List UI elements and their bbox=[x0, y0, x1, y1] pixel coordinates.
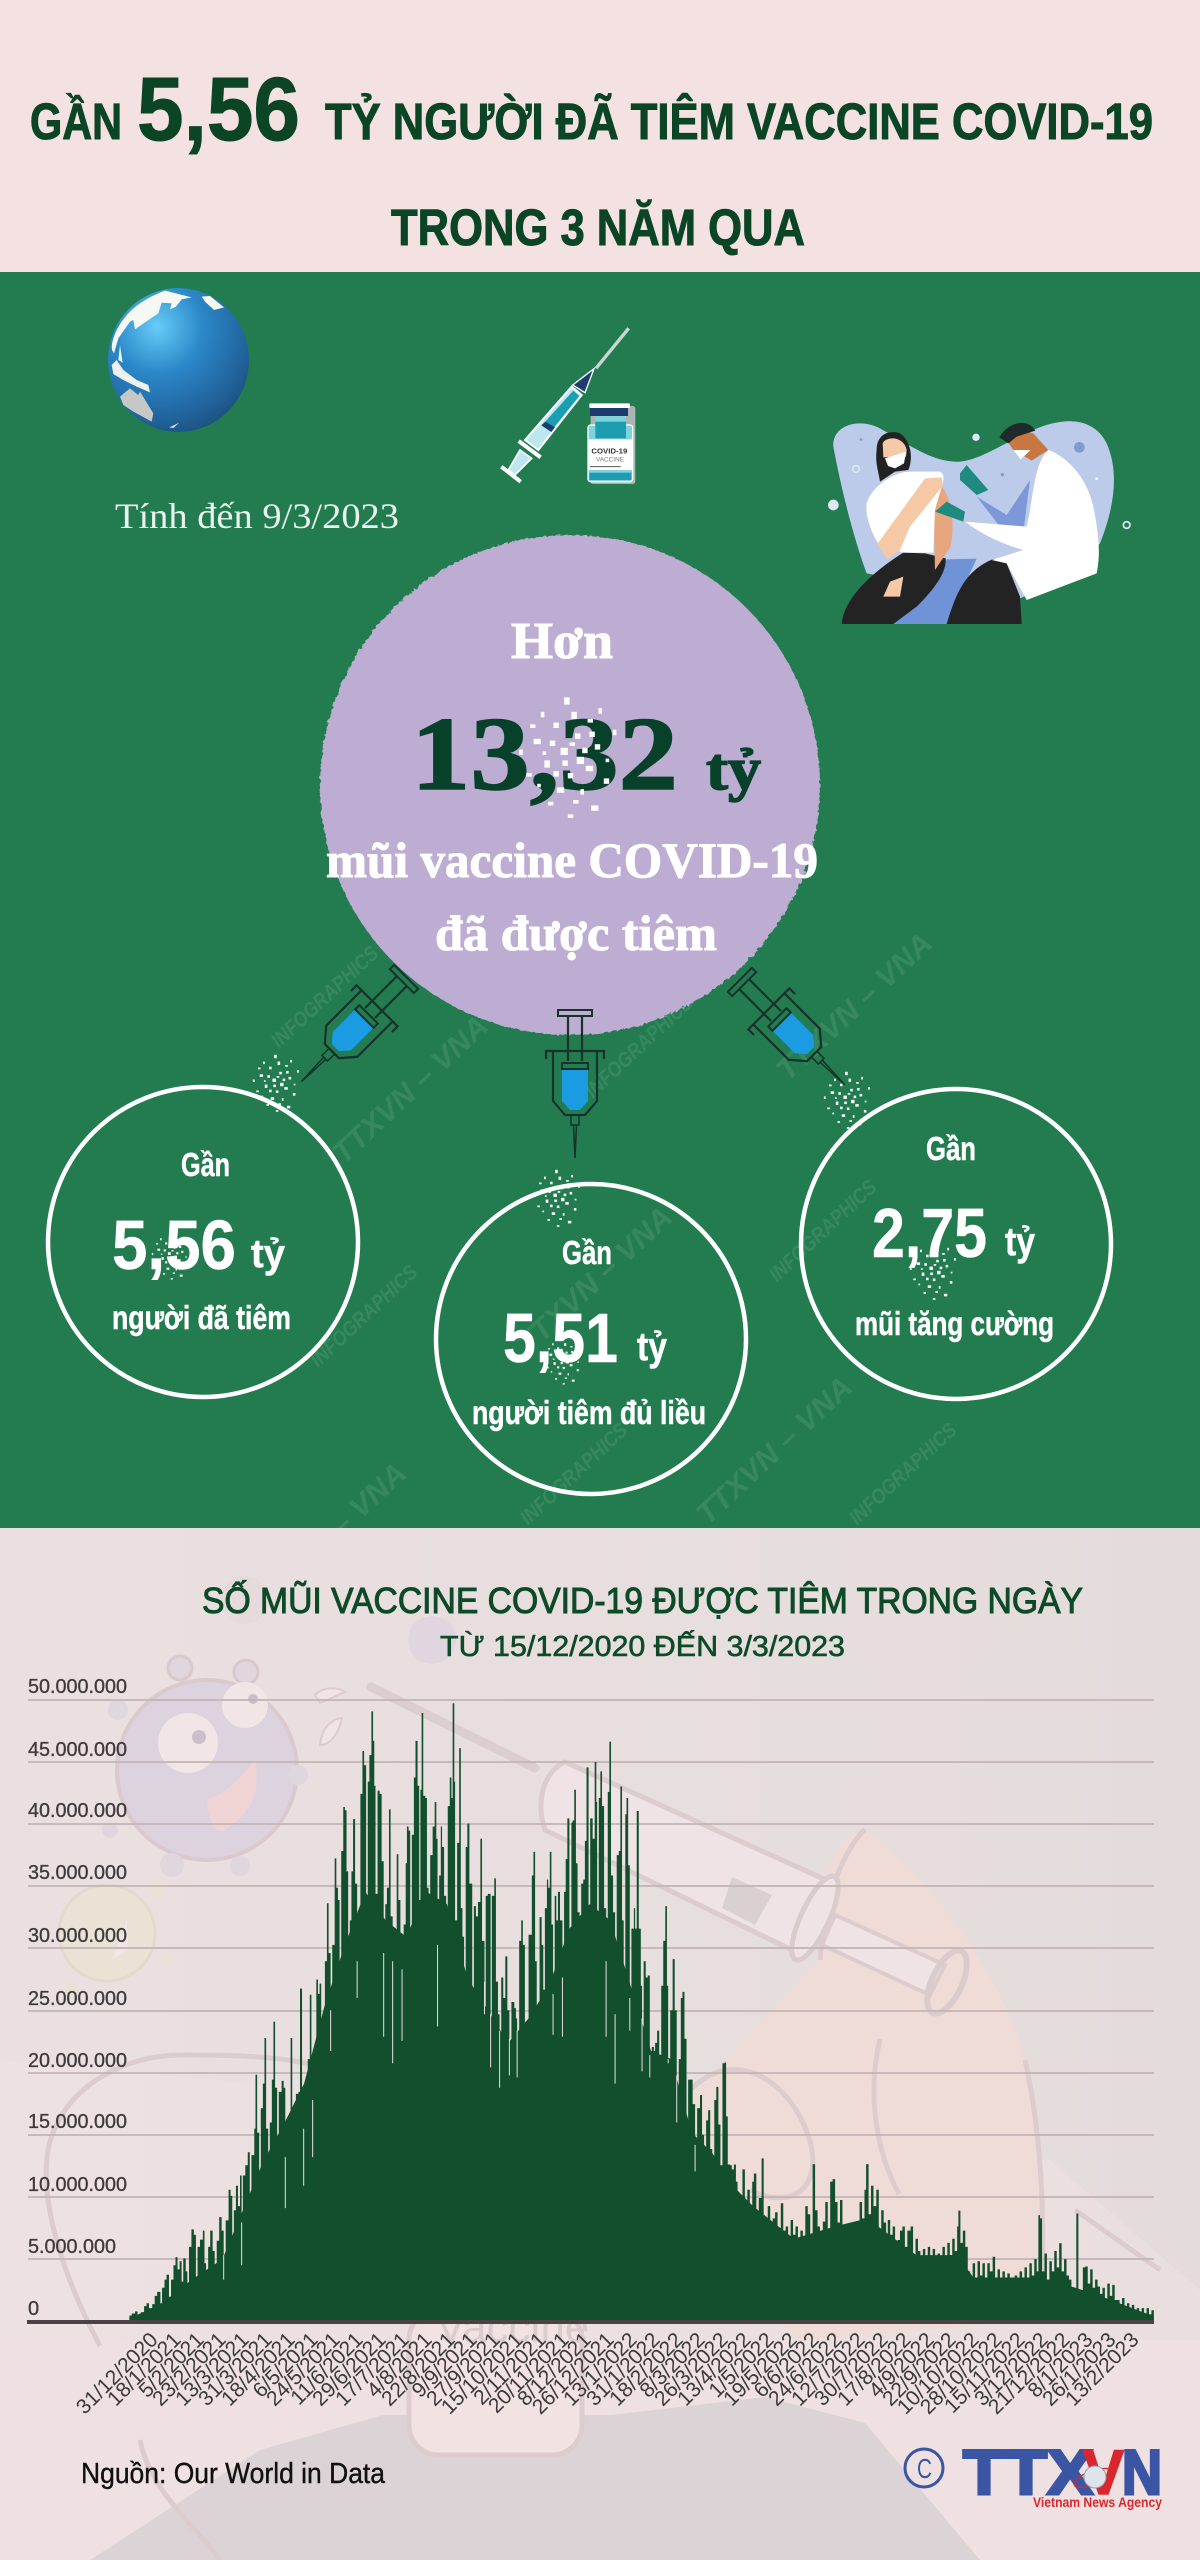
y axis labels: 20.000.000 bbox=[28, 2050, 127, 2072]
x axis date labels: 26/1/2023 bbox=[1038, 2328, 1121, 2411]
watermarks: INFOGRAPHICS bbox=[306, 1261, 422, 1372]
y axis labels: 35.000.000 bbox=[28, 1862, 127, 1884]
logo: TTXVN: TTX bbox=[963, 2438, 1093, 2508]
icon: left syringe bbox=[281, 956, 427, 1102]
text: 13,32 tỷ bbox=[411, 695, 761, 812]
icon: syringe and vaccine vial: COVID-19 bbox=[591, 446, 627, 455]
y axis labels: 45.000.000 bbox=[28, 1739, 127, 1761]
x axis date labels: 13/4/2022 bbox=[673, 2328, 756, 2411]
logo: TTXVN: N bbox=[1122, 2438, 1162, 2508]
watermarks: TTXVN – VNA bbox=[510, 1201, 679, 1361]
x axis date labels: 31/12/2020 bbox=[72, 2328, 163, 2419]
stat: booster doses: Gần bbox=[926, 1130, 976, 1167]
x axis date labels: 2/11/2021 bbox=[469, 2328, 551, 2410]
stat: booster doses: tỷ bbox=[1005, 1220, 1036, 1264]
speckle bbox=[519, 697, 616, 818]
x axis date labels bbox=[72, 2328, 1144, 2419]
illustration: faint viruses bbox=[221, 1576, 456, 1664]
logo: TTXVN bbox=[905, 2438, 1162, 2510]
icon: syringe and vaccine vial bbox=[501, 328, 635, 484]
x axis date labels: 8/3/2022 bbox=[635, 2328, 710, 2402]
watermarks: TTXVN – VNA bbox=[326, 1010, 495, 1170]
x axis date labels: 12/7/2022 bbox=[787, 2328, 870, 2411]
text: 13,32 tỷ: tỷ bbox=[706, 736, 761, 802]
title line 1: GẦN bbox=[30, 92, 122, 150]
icon: globe bbox=[108, 288, 249, 432]
x axis date labels: 22/9/2022 bbox=[878, 2328, 961, 2411]
watermarks: TTXVN – VNA bbox=[770, 927, 939, 1087]
stat: people vaccinated: 5,56 bbox=[112, 1206, 236, 1284]
title line 2: TRONG 3 NĂM QUA bbox=[391, 199, 805, 256]
watermarks: TTXVN – VNA bbox=[690, 1371, 859, 1531]
x axis date labels: 8/12/2021 bbox=[513, 2328, 596, 2411]
x axis date labels: 26/12/2021 bbox=[528, 2328, 619, 2419]
watermarks: INFOGRAPHICS bbox=[765, 1176, 881, 1287]
y axis labels bbox=[28, 1676, 127, 2320]
panel: global vaccination totals bbox=[0, 272, 1200, 1617]
y axis labels: 10.000.000 bbox=[28, 2174, 127, 2196]
watermarks: INFOGRAPHICS bbox=[516, 1419, 632, 1530]
watermarks: INFOGRAPHICS bbox=[267, 942, 383, 1053]
x axis date labels: 3/12/2022 bbox=[970, 2328, 1053, 2411]
logo: TTXVN: V bbox=[1083, 2438, 1124, 2508]
x axis date labels: 24/5/2021 bbox=[262, 2328, 345, 2411]
x axis date labels: 15/11/2022 bbox=[940, 2328, 1030, 2418]
x axis date labels: 30/7/2022 bbox=[810, 2328, 893, 2411]
x axis date labels: 4/9/2022 bbox=[864, 2328, 939, 2402]
stat: people vaccinated: Gần bbox=[181, 1146, 230, 1183]
x axis date labels: 13/2/2023 bbox=[1061, 2328, 1144, 2411]
x axis date labels: 1/5/2022 bbox=[704, 2328, 779, 2402]
y axis labels: 5.000.000 bbox=[28, 2236, 116, 2258]
background illustration: hand with syringe bbox=[0, 1687, 1200, 2560]
x axis date labels: 4/8/2021 bbox=[362, 2328, 437, 2402]
x axis date labels: 26/3/2022 bbox=[650, 2328, 733, 2411]
y axis labels: 40.000.000 bbox=[28, 1800, 127, 1822]
x axis date labels: 31/1/2022 bbox=[582, 2328, 665, 2411]
icon: centre syringe bbox=[546, 1010, 604, 1158]
x axis date labels: 8/1/2023 bbox=[1023, 2328, 1098, 2402]
x axis date labels: 28/10/2022 bbox=[916, 2328, 1007, 2419]
x axis date labels: 22/8/2021 bbox=[377, 2328, 460, 2411]
text: đã được tiêm: đã được tiêm bbox=[435, 905, 717, 961]
watermarks: TTXVN – VNA bbox=[244, 1457, 413, 1617]
x axis date labels: 18/1/2021 bbox=[103, 2328, 186, 2411]
x axis date labels: 6/5/2021 bbox=[248, 2328, 323, 2402]
text: date: Tính đến 9/3/2023 bbox=[115, 496, 399, 536]
y axis labels: 30.000.000 bbox=[28, 1925, 127, 1947]
panel: title header bbox=[0, 0, 1200, 272]
watermarks: INFOGRAPHICS bbox=[581, 992, 697, 1103]
stat: fully vaccinated bbox=[436, 1170, 746, 1494]
logo: TTXVN: Vietnam News Agency bbox=[1033, 2494, 1162, 2510]
x axis date labels: 13/1/2022 bbox=[559, 2328, 642, 2411]
stat: people vaccinated bbox=[48, 1055, 358, 1397]
x axis date labels: 13/3/2021 bbox=[171, 2328, 254, 2411]
x axis date labels: 29/6/2021 bbox=[308, 2328, 391, 2411]
x axis date labels: 10/10/2022 bbox=[893, 2328, 984, 2419]
illustration: small yellow virus bbox=[59, 1882, 172, 1997]
x axis date labels: 18/4/2021 bbox=[217, 2328, 300, 2411]
chart gridlines bbox=[28, 1700, 1154, 2259]
x axis date labels: 6/6/2022 bbox=[749, 2328, 824, 2402]
stat: fully vaccinated: Gần bbox=[562, 1234, 612, 1271]
stat: people vaccinated: tỷ bbox=[251, 1232, 286, 1276]
stat: people vaccinated: người đã tiêm bbox=[112, 1299, 291, 1336]
y axis labels: 25.000.000 bbox=[28, 1988, 127, 2010]
stat: booster doses: 2,75 bbox=[872, 1194, 987, 1272]
bar chart: daily doses bbox=[129, 1703, 1154, 2322]
text: Hơn: Hơn bbox=[511, 613, 613, 670]
x axis date labels: 17/7/2021 bbox=[331, 2328, 414, 2411]
stat: booster doses: mũi tăng cường bbox=[855, 1305, 1054, 1342]
chart title: SỐ MŨI VACCINE COVID-19 ĐƯỢC TIÊM TRONG NGÀY bbox=[202, 1579, 1083, 1621]
source note: Nguồn: Our World in Data bbox=[81, 2458, 386, 2490]
background illustration: hand with syringe: Vaccine bbox=[436, 2303, 589, 2352]
text: 13,32 tỷ: 13,32 bbox=[411, 695, 678, 812]
icon: right syringe bbox=[719, 959, 865, 1105]
x axis date labels: 27/9/2021 bbox=[422, 2328, 505, 2411]
x axis date labels: 5/2/2021 bbox=[134, 2328, 209, 2402]
chart subtitle: TỪ 15/12/2020 ĐẾN 3/3/2023 bbox=[440, 1629, 845, 1663]
x axis date labels: 17/8/2022 bbox=[833, 2328, 916, 2411]
icon: doctor vaccinating patient bbox=[828, 421, 1130, 624]
big circle: total doses bbox=[320, 535, 820, 1035]
title line 1: 5,56 bbox=[137, 60, 300, 160]
x axis date labels: 11/6/2021 bbox=[286, 2328, 368, 2410]
stat: fully vaccinated: 5,51 bbox=[503, 1299, 618, 1377]
illustration: large purple virus bbox=[102, 1656, 345, 1877]
x axis date labels: 9/9/2021 bbox=[407, 2328, 482, 2402]
stat: fully vaccinated: tỷ bbox=[637, 1325, 668, 1369]
x axis date labels: 31/3/2021 bbox=[194, 2328, 277, 2411]
x axis date labels: 19/5/2022 bbox=[719, 2328, 802, 2411]
x axis date labels: 15/10/2021 bbox=[437, 2328, 528, 2419]
y axis labels: 50.000.000 bbox=[28, 1676, 127, 1698]
stat: fully vaccinated: người tiêm đủ liều bbox=[472, 1394, 706, 1431]
logo: TTXVN: C bbox=[917, 2453, 932, 2484]
x axis date labels: 18/2/2022 bbox=[605, 2328, 688, 2411]
watermarks bbox=[244, 927, 961, 1617]
title line 1 bbox=[30, 60, 1153, 160]
stat: booster doses bbox=[801, 1072, 1111, 1399]
text: mũi vaccine COVID-19: mũi vaccine COVID-19 bbox=[326, 832, 818, 888]
watermarks: INFOGRAPHICS bbox=[845, 1419, 961, 1530]
x axis date labels: 20/11/2021 bbox=[484, 2328, 574, 2418]
x axis date labels: 24/6/2022 bbox=[764, 2328, 847, 2411]
chart baseline bbox=[27, 2320, 1154, 2324]
x axis date labels: 21/12/2022 bbox=[984, 2328, 1075, 2419]
panel: daily doses chart section bbox=[0, 1528, 1200, 2560]
y axis labels: 0 bbox=[28, 2298, 39, 2320]
y axis labels: 15.000.000 bbox=[28, 2111, 127, 2133]
icon: syringe and vaccine vial: VACCINE bbox=[596, 458, 624, 464]
x axis date labels: 23/2/2021 bbox=[148, 2328, 231, 2411]
